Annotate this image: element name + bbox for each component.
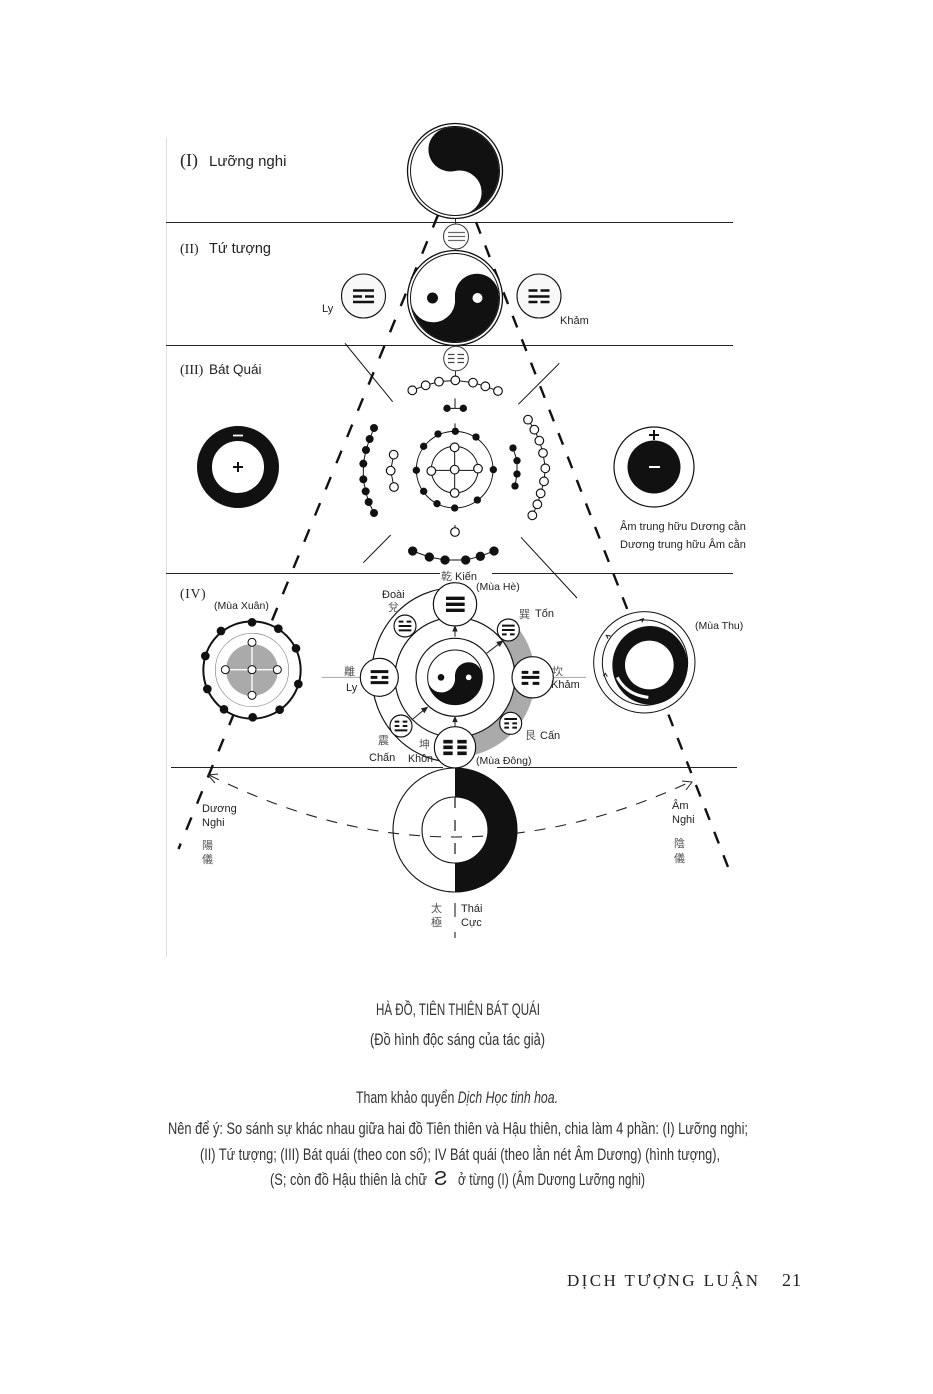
label: Ly: Ly — [322, 303, 334, 315]
label: Dương Nghi — [202, 803, 237, 866]
heading: section IV: (IV) — [180, 586, 206, 601]
labels: Bát Quái names: Đoài — [382, 589, 405, 601]
arrow: right dashed divergence line — [476, 222, 728, 867]
heading: section II: (II) — [180, 242, 199, 257]
labels: Bát Quái names: 離 — [344, 664, 355, 678]
text: Âm Dương note: Dương trung hữu Âm cằn — [620, 538, 746, 551]
caption: subtitle: (Đồ hình độc sáng của tác giả) — [370, 1030, 545, 1049]
label: Âm Nghi — [672, 799, 695, 865]
icon: small circle three lines — [444, 224, 468, 249]
connector: top yin-yang to small trigrams — [454, 218, 456, 380]
label: Thái Cực: Cực — [461, 917, 482, 929]
text: note line 3: ở từng (I) (Âm Dương Lưỡng nghi) — [458, 1170, 645, 1189]
heading: section I: Lưỡng nghi — [209, 153, 286, 170]
icon: small circle broken lines — [444, 346, 468, 371]
label: Âm Nghi: 陰 — [674, 836, 685, 850]
labels: Bát Quái names: 震 — [378, 734, 389, 747]
chart: Hà Đồ number diagram — [345, 343, 577, 598]
heading: section III: Bát Quái — [209, 362, 262, 377]
caption: title: HÀ ĐỒ, TIÊN THIÊN BÁT QUÁI — [376, 1000, 540, 1019]
text: note line 1: Nên để ý: So sánh sự khác nhau giữa hai đồ Tiên thiên và Hậu thiên, chia làm 4 phần: (I) Lưỡng nghi; — [168, 1119, 748, 1138]
label: Thái Cực: 極 — [431, 915, 442, 929]
labels: Bát Quái names — [344, 570, 580, 767]
label: Âm Nghi: 儀 — [674, 851, 685, 865]
label: Dương Nghi: Nghi — [202, 817, 225, 829]
heading: section III — [180, 362, 262, 378]
heading: section III: (III) — [180, 363, 204, 378]
icon: Ly trigram circle — [342, 274, 386, 318]
labels: Bát Quái names: Cấn — [540, 730, 560, 742]
arrow: left dashed divergence line — [178, 215, 438, 849]
label: Mùa Thu: (Mùa Thu) — [695, 620, 743, 632]
heading: section II: Tứ tượng — [209, 241, 271, 257]
label: Âm Nghi: Âm — [672, 799, 688, 812]
labels: Bát Quái names: 巽 — [519, 608, 530, 621]
text: note line 3 — [270, 1168, 645, 1190]
labels: Bát Quái names: 兌 — [388, 601, 399, 614]
label: Thái Cực: 太 — [431, 902, 442, 915]
label: Dương Nghi: 陽 — [202, 839, 213, 852]
text: note line 3: Ƨ — [434, 1168, 447, 1190]
text: Âm Dương note — [620, 520, 746, 551]
axis: vertical dashed line below Thái Cực — [454, 903, 456, 938]
footer: running title and page number: 21 — [782, 1270, 802, 1290]
labels: Bát Quái names: Khảm — [551, 679, 580, 691]
labels: Bát Quái names: 坎 — [552, 665, 563, 678]
labels: Bát Quái names: Tốn — [535, 608, 554, 620]
icon: black disc with minus centre — [614, 427, 694, 507]
label: Dương Nghi: 儀 — [202, 852, 213, 866]
text: Âm Dương note: Âm trung hữu Dương cằn — [620, 520, 746, 533]
chart: spring circle — [201, 618, 303, 722]
heading: section II — [180, 241, 271, 257]
label: Dương Nghi: Dương — [202, 803, 237, 815]
heading: section I — [180, 150, 286, 171]
labels: Bát Quái names: 坤 — [419, 737, 430, 751]
label: Mùa Xuân: (Mùa Xuân) — [214, 600, 269, 612]
labels: Bát Quái names: Kiến — [455, 571, 477, 583]
chart: Bát Quái ring — [322, 583, 586, 768]
labels: Bát Quái names: Ly — [346, 682, 358, 694]
icon: yin-yang Lưỡng nghi — [408, 119, 507, 219]
footer: running title and page number: DỊCH TƯỢNG LUẬN — [567, 1271, 758, 1290]
text: note line 3: (S; còn đồ Hậu thiên là chữ — [270, 1170, 427, 1189]
icon: Khảm trigram circle — [517, 274, 561, 318]
text: reference note: Tham khảo quyển Dịch Học tinh hoa. — [356, 1088, 558, 1107]
label: Thái Cực: Thái — [461, 903, 482, 915]
labels: Bát Quái names: Chấn — [369, 752, 395, 764]
icon: yin-yang Tứ tượng — [408, 250, 503, 346]
heading: section I: (I) — [180, 150, 198, 171]
chart: Thái Cực circle with dashed arc — [208, 768, 692, 892]
labels: Bát Quái names: 艮 — [525, 729, 536, 742]
label: Khảm: Khảm — [560, 315, 589, 327]
icon: black ring with plus centre — [204, 434, 272, 500]
labels: Bát Quái names: Khôn — [408, 753, 433, 765]
label: Âm Nghi: Nghi — [672, 814, 695, 826]
label: Thái Cực — [431, 902, 482, 929]
labels: Bát Quái names: 乾 — [441, 570, 452, 583]
labels: Bát Quái names: (Mùa Hè) — [476, 581, 520, 593]
text: note line 2: (II) Tứ tượng; (III) Bát quái (theo con số); IV Bát quái (theo lằn nét Âm Dương) (hình tượng), — [200, 1145, 720, 1164]
chart: autumn spiral — [594, 612, 695, 713]
labels: Bát Quái names: (Mùa Đông) — [476, 755, 531, 767]
